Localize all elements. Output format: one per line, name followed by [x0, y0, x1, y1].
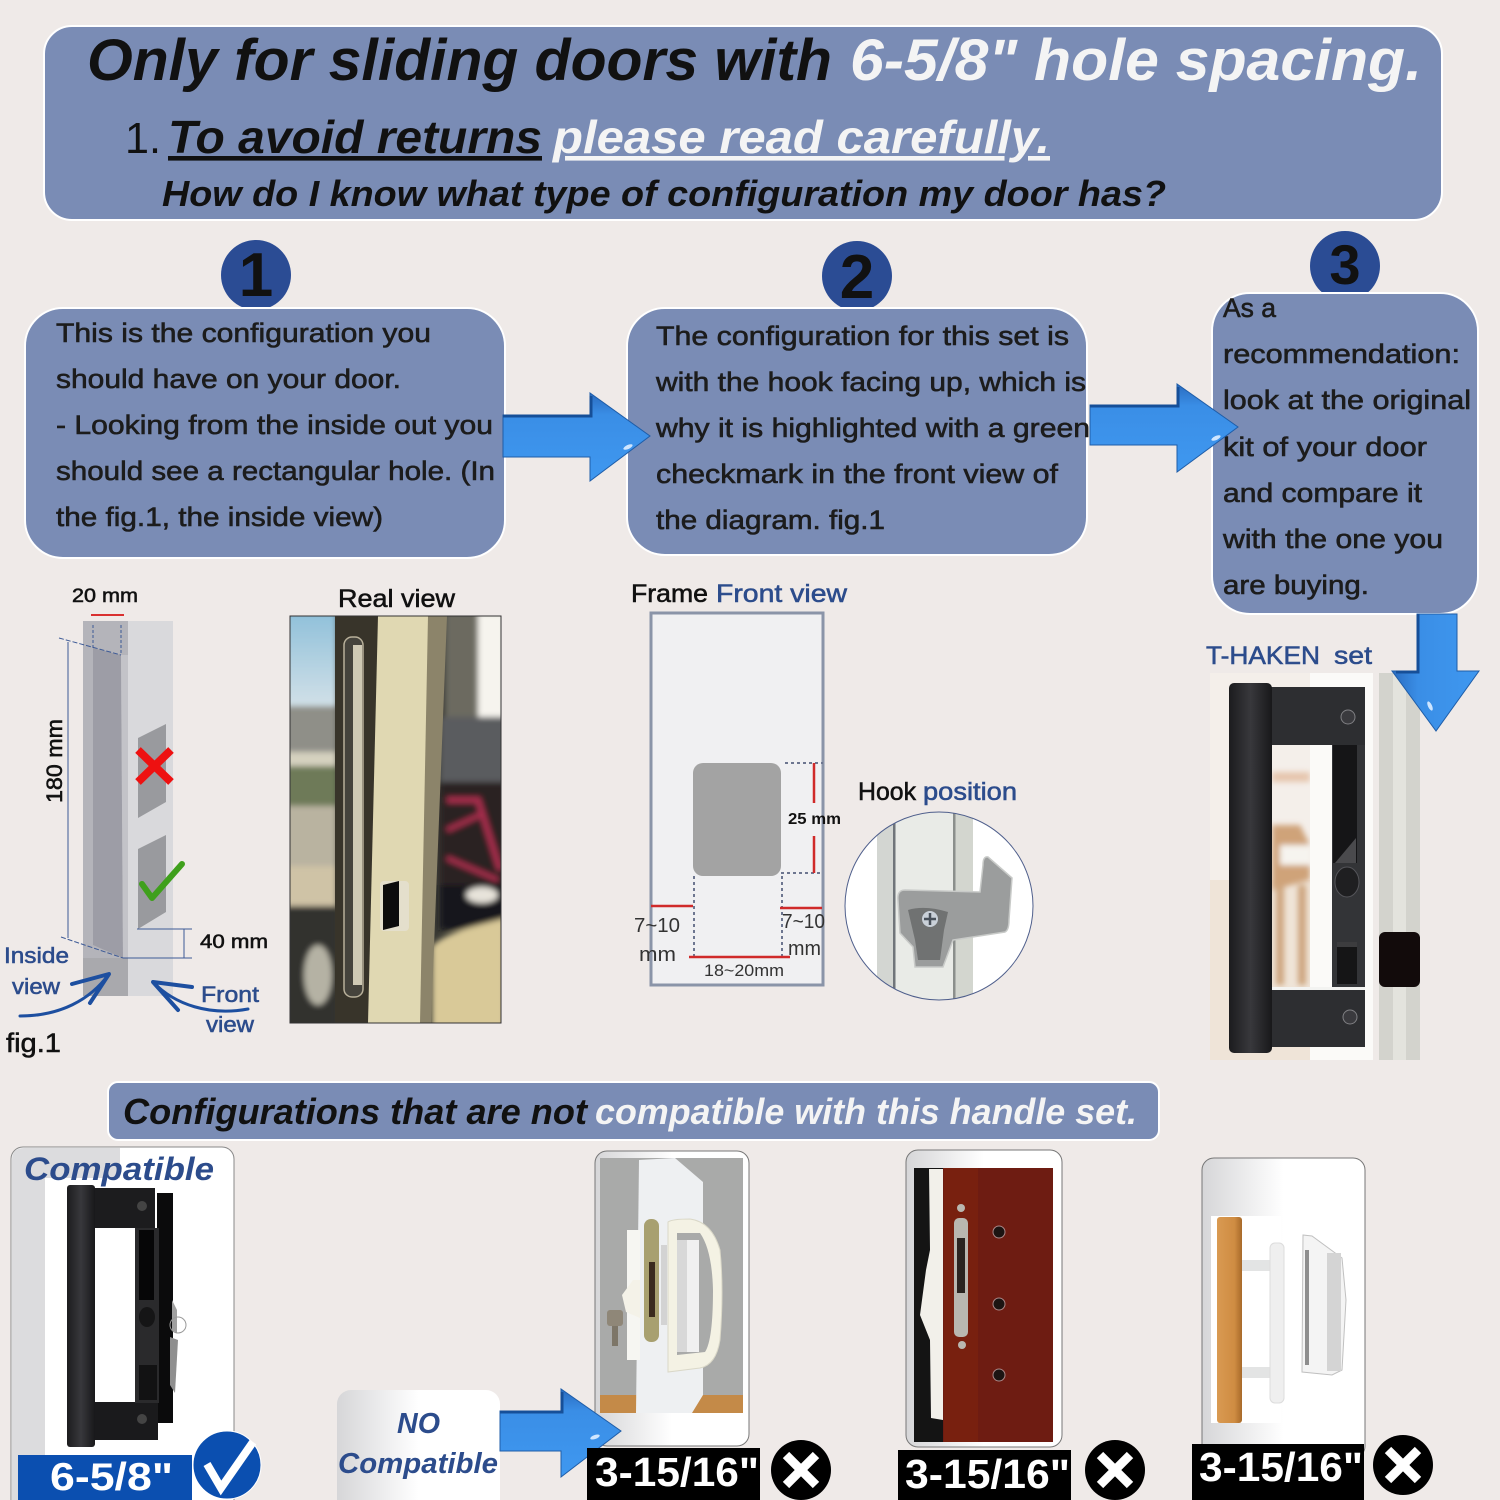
panel: step 1: - Looking from the inside out you	[56, 410, 493, 440]
arrow: no compatible to cards	[500, 1389, 621, 1477]
photo	[600, 1158, 743, 1413]
panel: step 1: the fig.1, the inside view)	[56, 502, 383, 532]
heading: hook position: position	[923, 778, 1017, 806]
step badge 1	[221, 240, 291, 310]
card: wood handle	[1192, 1158, 1433, 1500]
warning line: To avoid returns	[168, 111, 542, 163]
panel: step 3: and compare it	[1223, 478, 1423, 508]
size label: white D-handle: 3-15/16"	[595, 1449, 759, 1495]
photo frame	[290, 616, 501, 1023]
heading: hook position: Hook	[858, 778, 916, 806]
heading: T-HAKEN set: T-HAKEN	[1206, 642, 1320, 670]
arrow: step 2 to step 3	[1090, 384, 1238, 472]
heading: T-HAKEN set: set	[1334, 642, 1372, 670]
card: compatible handle	[11, 1147, 261, 1500]
panel: step 1: This is the configuration you	[56, 318, 431, 348]
panel: step 1: should have on your door.	[56, 364, 401, 394]
label: 20 mm: 20 mm	[72, 586, 138, 607]
step badge 2	[822, 241, 892, 312]
panel: step 3: look at the original	[1223, 385, 1471, 415]
heading: frame front view: Front view	[716, 580, 848, 608]
diagram: frame front view	[634, 613, 841, 985]
panel: step 3: are buying.	[1223, 570, 1369, 600]
arrow: step 1 to step 2	[503, 393, 650, 481]
handle drawing	[67, 1185, 186, 1447]
panel: step 3: recommendation:	[1223, 339, 1460, 369]
panel: step 2: checkmark in the front view of	[656, 459, 1059, 489]
panel: step 2: why it is highlighted with a green	[655, 413, 1090, 443]
photo	[1211, 1216, 1346, 1423]
panel: step 1: should see a rectangular hole. (In	[56, 456, 495, 486]
label: 7~10 mm left: mm	[639, 944, 676, 966]
warning line	[125, 111, 1050, 163]
panel: step 3: As a	[1223, 293, 1277, 323]
card: white D-handle	[595, 1151, 749, 1446]
header panel	[44, 26, 1442, 220]
size label: 3-15/16"	[1199, 1444, 1363, 1490]
label: 18~20mm: 18~20mm	[704, 961, 784, 980]
panel: step 2: the diagram. fig.1	[656, 505, 885, 535]
panel: step 1	[25, 308, 505, 558]
label: front view: Front	[201, 982, 259, 1007]
hole with green check	[138, 835, 182, 929]
step badge 2: 2	[840, 243, 874, 312]
label: inside view	[4, 943, 69, 999]
label: 40 mm: 40 mm	[200, 932, 268, 953]
banner: not compatible: Configurations that are not	[123, 1091, 589, 1132]
panel: step 2	[627, 308, 1090, 555]
heading: hook position	[858, 778, 1017, 806]
panel: step 2: The configuration for this set is	[656, 321, 1069, 351]
icon: blue check	[193, 1431, 261, 1499]
label: 7~10 mm left: 7~10	[634, 915, 680, 937]
icon: X white D-handle	[771, 1440, 831, 1500]
card: red door handle	[898, 1150, 1145, 1500]
panel: step 3	[1212, 293, 1478, 614]
icon: X	[1085, 1440, 1145, 1500]
header question: How do I know what type of configuration my door has?	[162, 173, 1166, 214]
photo: hook close-up	[844, 812, 1034, 1000]
title: Only for sliding doors with	[87, 28, 832, 93]
label: 180 mm: 180 mm	[42, 719, 67, 803]
step badge 3	[1310, 231, 1380, 301]
diagram: fig.1 frame	[42, 586, 268, 996]
heading: frame front view: Frame	[631, 580, 708, 608]
label: front view	[201, 982, 259, 1037]
icon: X	[1373, 1435, 1433, 1495]
title: 6-5/8" hole spacing.	[850, 28, 1422, 93]
arrow: front view	[153, 982, 248, 1011]
label: 7~10 mm right	[782, 911, 825, 960]
step badge 3: 3	[1329, 233, 1361, 296]
panel: step 3: with the one you	[1222, 524, 1443, 554]
callout: no compatible	[337, 1390, 500, 1500]
warning line: please read carefully.	[551, 111, 1050, 163]
photo: real view	[285, 612, 506, 1031]
photo	[914, 1168, 1053, 1442]
label: 25 mm: 25 mm	[788, 811, 841, 828]
label: inside view: Inside	[4, 943, 69, 968]
label: compatible: Compatible	[24, 1151, 214, 1187]
arrow: inside view	[20, 974, 109, 1016]
step badge 1: 1	[239, 241, 273, 310]
arrow: step 3 down	[1392, 614, 1479, 731]
label: 7~10 mm right: 7~10	[782, 911, 825, 933]
hole with red cross	[138, 724, 171, 818]
heading: real view: Real view	[338, 585, 456, 613]
size label: 3-15/16"	[905, 1451, 1070, 1497]
rectangular hole	[693, 763, 781, 876]
banner: not compatible: compatible with this handle set.	[595, 1091, 1137, 1132]
callout: no compatible: Compatible	[338, 1448, 498, 1480]
label: fig.1: fig.1	[6, 1028, 61, 1058]
warning line: 1.	[125, 114, 161, 163]
label: 7~10 mm right: mm	[788, 938, 821, 960]
label: front view: view	[206, 1012, 254, 1037]
label: inside view: view	[12, 974, 60, 999]
label: 7~10 mm left	[634, 915, 680, 966]
banner: not compatible	[108, 1082, 1159, 1140]
dimension lines	[59, 625, 192, 958]
size label: 6-5/8: 6-5/8"	[50, 1456, 173, 1499]
panel: step 3: kit of your door	[1223, 432, 1427, 462]
photo: T-HAKEN set	[1210, 673, 1420, 1060]
heading: frame front view	[631, 580, 848, 608]
heading: T-HAKEN set	[1206, 642, 1372, 670]
panel: step 2: with the hook facing up, which is	[655, 367, 1086, 397]
callout: no compatible: NO	[397, 1408, 440, 1440]
size label: 6-5/8	[18, 1455, 192, 1500]
